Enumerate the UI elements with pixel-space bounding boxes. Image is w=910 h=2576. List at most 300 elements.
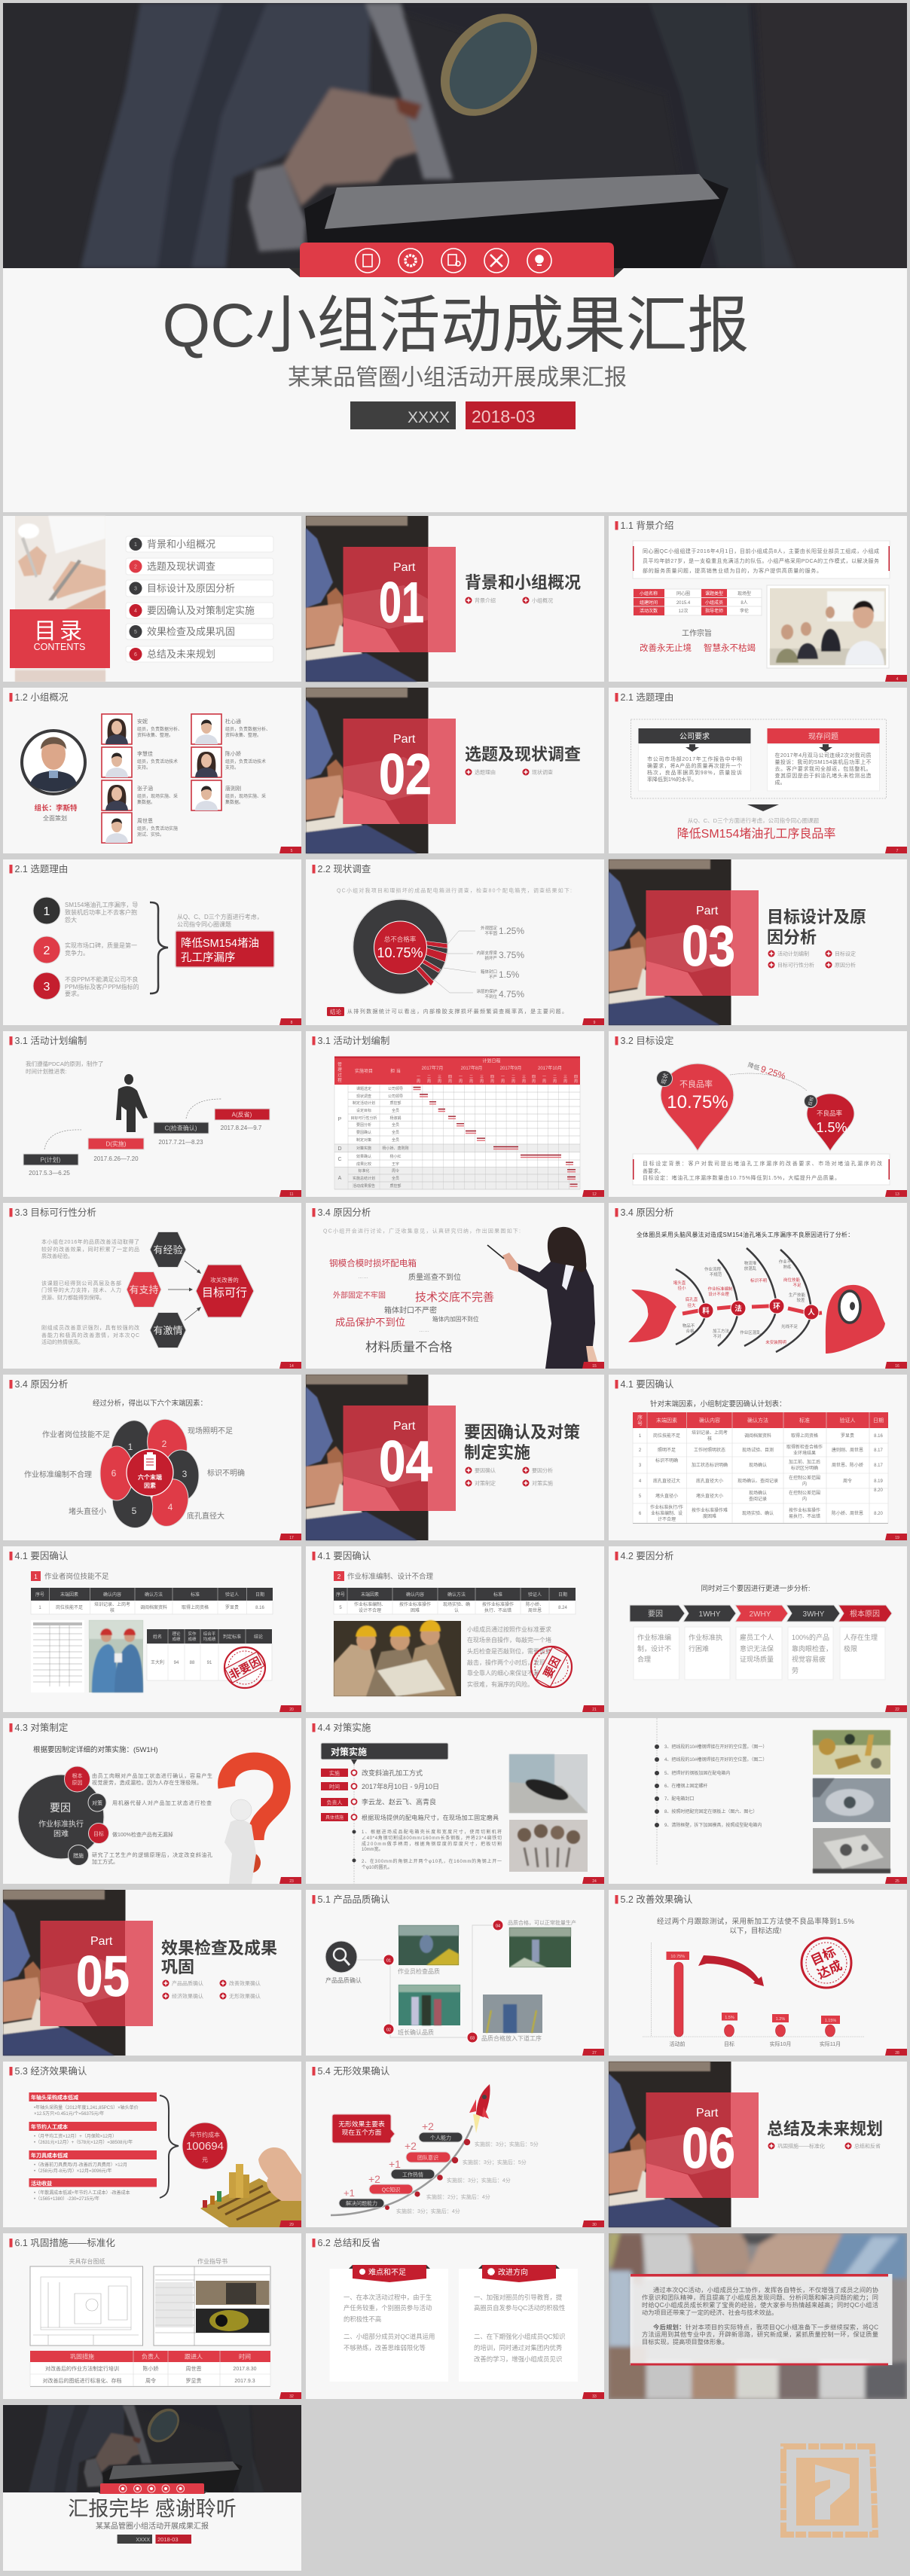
current value drop xyxy=(657,1064,734,1151)
company requirement card xyxy=(639,728,750,791)
illustration: rocket xyxy=(469,2084,490,2133)
standardization table: 巩固措施 xyxy=(70,2353,94,2361)
date tag: 2018-03 xyxy=(472,407,535,426)
target description box: 目标设定：堵油孔工序漏序数量由10.75%降低到1.5%，大幅提升产品质量。 xyxy=(643,1174,840,1181)
decision note: 从Q、C、D三个方面进行考虑， xyxy=(177,913,263,920)
gantt table: 质控部 xyxy=(389,1100,402,1106)
step C: C(检查确认) xyxy=(164,1124,197,1131)
card 1 xyxy=(634,1627,679,1680)
contents item 1 xyxy=(126,536,273,552)
page number: 25 xyxy=(895,1879,899,1884)
page number: 23 xyxy=(289,1879,294,1884)
page number xyxy=(279,2392,301,2399)
motto: 智慧永不枯竭 xyxy=(704,642,756,653)
translucent text panel: 今后规划：针对本项目的实际特点，我项目QC小组准备下一步继续探索，将QC xyxy=(653,2323,878,2330)
speech bubble: 无形效果主要表 xyxy=(338,2120,385,2128)
page number xyxy=(885,1705,907,1712)
petal diagram: 因素 xyxy=(144,1482,156,1489)
card 2: 行困难 xyxy=(689,1644,709,1653)
measure texts: 由员工肉眼对产品加工状态进行确认，容易产生 xyxy=(92,1772,212,1779)
gantt table: 设定目标 xyxy=(356,1108,371,1113)
chevron: 2WHY: 2WHY xyxy=(750,1610,771,1619)
photo: team meeting xyxy=(767,585,889,668)
confirmation table: 确认方法 xyxy=(145,1592,163,1598)
section topics xyxy=(163,1979,261,1999)
panel: section 05 xyxy=(3,1890,301,2056)
company requirement card: 档次，良品率据高到98%，质量投诉 xyxy=(647,769,742,776)
experience text: 本小组在2016年的品质改善活动取得了 xyxy=(41,1238,139,1245)
panel: 3.3 target feasibility xyxy=(3,1203,301,1369)
current problem card: 去。客户要求我司全部返，包括整机。 xyxy=(774,765,871,772)
page number xyxy=(885,1362,907,1369)
bone labels: 放混乱 xyxy=(744,1265,757,1271)
red part block: 04 xyxy=(379,1430,432,1494)
heading: 3.4 原因分析 xyxy=(318,1207,371,1218)
step list xyxy=(655,1744,767,1828)
cause words: 成品保护不到位 xyxy=(335,1317,405,1328)
plan table: 易执行、不出错 xyxy=(789,1513,820,1519)
heading: 3.4 原因分析 xyxy=(15,1379,68,1390)
annual saving badge: 100694 xyxy=(186,2140,224,2153)
bone labels: 熟练 xyxy=(783,1264,792,1270)
step D: D(实施) xyxy=(105,1140,127,1148)
description text: 靠全靠人的细心来保证不漏敲 xyxy=(467,1669,545,1677)
bar: November: 1.15% xyxy=(825,2019,836,2023)
page number: 5 xyxy=(291,849,293,853)
hexagon: experience xyxy=(150,1232,186,1267)
annual saving badge: 元 xyxy=(202,2156,208,2163)
red part block: 01 xyxy=(379,571,424,635)
photo: machined aluminum xyxy=(813,1778,890,1822)
page number xyxy=(279,1018,301,1025)
step C: 2017.7.21—8.23 xyxy=(158,1139,203,1146)
standardization table: 时间 xyxy=(239,2353,251,2361)
current problem card: 在2017年4月双马公司连续2次对我司质 xyxy=(774,752,871,758)
gantt table: C xyxy=(337,1157,342,1162)
icon: magnifying report xyxy=(441,249,466,273)
growth curve xyxy=(331,2126,472,2215)
panel: 6.1 standardization xyxy=(3,2233,301,2399)
curve nodes xyxy=(385,2139,470,2210)
pill: work passion: 工作热情 xyxy=(402,2171,423,2178)
card 4: 靠肉眼检查， xyxy=(792,1644,832,1653)
motto xyxy=(640,628,756,653)
confirmation table: 末端因素 xyxy=(60,1592,78,1598)
panel: 3.2 target setting xyxy=(609,1031,907,1197)
plan table: 堵头直径小 xyxy=(655,1493,678,1499)
gantt table: 王宇 xyxy=(392,1161,399,1167)
page number: 12 xyxy=(592,1192,597,1197)
heading: 5.2 改善效果确认 xyxy=(621,1894,693,1905)
label 3: 1.5% xyxy=(499,969,520,980)
member 4: 组员，负责活动技术 xyxy=(225,758,266,765)
plan table: 标准 xyxy=(799,1417,810,1424)
step A xyxy=(215,1109,270,1131)
exam score table xyxy=(147,1629,272,1680)
panel: section 02 xyxy=(306,688,604,853)
plan table: 核 xyxy=(707,1436,712,1442)
support text: 该课题已经得到公司高层及各部 xyxy=(41,1280,121,1286)
heading: 5.3 经济效果确认 xyxy=(15,2065,87,2077)
bone labels: 岗位技能 xyxy=(783,1277,800,1283)
chevron: key cause xyxy=(630,1605,685,1622)
target value drop: 目标 xyxy=(807,1096,815,1106)
description text: 小组成员通过按照作业标准要求 xyxy=(467,1625,551,1633)
bone labels: 光线不足 xyxy=(781,1323,798,1329)
confirmation table: 按作业标准操作 xyxy=(482,1601,514,1607)
translucent text panel: 通过本次QC活动，小组成员分工协作，发挥各自特长，不仅增强了成员之间的协 xyxy=(653,2286,878,2294)
step C xyxy=(154,1122,209,1146)
confirmation table: 周世恩 xyxy=(528,1607,542,1613)
section heading: 目标设计及原 xyxy=(767,908,866,926)
heading: 4.4 对策实施 xyxy=(318,1722,371,1733)
heading: 5.1 产品品质确认 xyxy=(318,1894,390,1905)
pill: team spirit: 团队意识 xyxy=(417,2154,438,2161)
row: owner xyxy=(321,1797,436,1806)
node: target xyxy=(89,1823,108,1844)
section topics: 经济效果确认 xyxy=(172,1993,203,1999)
info table: 同心圈 xyxy=(676,591,690,597)
highlighted statement xyxy=(176,931,274,967)
plan table: 查阅记录 xyxy=(749,1496,767,1502)
row: implement: 改变斜油孔加工方式 xyxy=(362,1769,423,1777)
section topics: 要因确认 xyxy=(475,1467,496,1473)
node: action: 措施 xyxy=(73,1852,84,1859)
plan table: 4 xyxy=(639,1479,642,1484)
pill: QC knowledge xyxy=(368,2173,413,2194)
confirmation table: 罗显贵 xyxy=(225,1604,239,1610)
member 3: 李慧佳 xyxy=(137,750,153,757)
steps text: 成200mm做手柄用，根据角钢厚度的厚度尺寸，把板切割 xyxy=(362,1841,502,1847)
section heading: 效果检查及成果 xyxy=(161,1939,277,1958)
plan table: 现场确认、查阅记录 xyxy=(737,1478,778,1484)
card 3: 雇员工个人 xyxy=(740,1633,774,1641)
photo: workers in blue xyxy=(89,1620,143,1692)
reason 2 xyxy=(33,936,137,963)
panel: 4.1 non-key cause xyxy=(3,1546,301,1712)
gantt table xyxy=(334,1056,580,1189)
plan table: 8.17 xyxy=(874,1448,883,1453)
member 5: 组员，现场实施、采 xyxy=(137,793,178,799)
before and after scores: 实施前：3分；实施后：4分 xyxy=(447,2177,511,2184)
steps text xyxy=(353,1829,502,1870)
member 2 xyxy=(191,714,270,744)
panel: 4.2 cause analysis whys xyxy=(609,1546,907,1712)
cost item 4: 活动收益 xyxy=(31,2180,52,2187)
stamp: not key cause xyxy=(224,1647,265,1688)
cause words: 技术交底不完善 xyxy=(415,1290,494,1304)
gantt table: 管 xyxy=(337,1061,342,1067)
confirmation table: 设计不合理 xyxy=(359,1607,381,1613)
card 1: 合理 xyxy=(637,1655,651,1663)
measure texts: 研究了工艺生产的逻辑原理后，决定改变斜油孔 xyxy=(92,1851,212,1858)
hexagon: feasible goal: 攻关改善的 xyxy=(210,1276,239,1283)
stamp: target reached xyxy=(802,1938,851,1988)
cost item 4: •（年散漏成本低减+年节约人工成本）-改善成本 xyxy=(34,2190,130,2196)
red part block xyxy=(344,547,456,652)
panel: contents slide xyxy=(3,516,301,682)
red contents block: 目录 xyxy=(34,619,85,644)
gantt table: 杨淑娟 xyxy=(389,1116,402,1121)
step 03: 品质合格放入下道工序 xyxy=(481,2034,542,2042)
header block xyxy=(321,1743,448,1765)
panel: 2.1 topic reasons conclusion xyxy=(3,859,301,1025)
section topics xyxy=(466,597,553,604)
bone labels: 底孔直 xyxy=(686,1296,698,1302)
red part block: 03 xyxy=(682,914,735,978)
panel: 5.2 improvement effect xyxy=(609,1890,907,2056)
panel: 5.4 intangible effect xyxy=(306,2062,604,2227)
cost item 2 xyxy=(29,2122,157,2145)
measure texts: 视觉疲劳，造成漏检。因为人存在生理极限。 xyxy=(92,1779,202,1786)
contents item 6: 6 xyxy=(134,652,137,658)
hexagon: feasible goal: 目标可行 xyxy=(202,1286,247,1299)
red part block xyxy=(344,1406,456,1511)
card: improvements: 的培训，同时通过对集团内优秀 xyxy=(474,2344,563,2352)
illustration: coins and abacus with hand xyxy=(200,2147,301,2227)
chevron: 3WHY: 3WHY xyxy=(803,1610,825,1619)
intro: 以下，目标达成! xyxy=(729,1927,782,1936)
panel: closing thanks slide xyxy=(3,2402,301,2571)
page number: 20 xyxy=(289,1708,294,1712)
gantt table: 周令 xyxy=(392,1168,399,1174)
passion text: 善能力和极高的改善激情，对本次QC xyxy=(41,1332,139,1338)
gantt table: 标准化 xyxy=(358,1168,370,1174)
plan table: 取得新检查合格作 xyxy=(786,1444,823,1450)
current value drop: 10.75% xyxy=(667,1092,728,1113)
page number xyxy=(582,2220,604,2227)
section topics: 要因分析 xyxy=(532,1467,553,1473)
card: improvements: 二、在下期强化小组成员QC知识 xyxy=(474,2333,565,2340)
confirmation table: 陈小娇、 xyxy=(526,1601,544,1607)
section heading: 总结及未来规划 xyxy=(767,2120,883,2138)
work instruction document xyxy=(154,2266,270,2346)
factor labels: 标识不明确 xyxy=(207,1468,245,1478)
stamp: not key cause: 非要因 xyxy=(228,1655,264,1682)
bone labels: 作业流程 xyxy=(704,1266,721,1272)
gantt table: 实施总结计划 xyxy=(353,1176,375,1181)
cause words: 质量巡查不到位 xyxy=(408,1272,461,1282)
confirmation table: 困难 xyxy=(411,1607,420,1613)
spine xyxy=(682,1306,822,1314)
down arrow xyxy=(698,1955,764,1986)
row: measure xyxy=(321,1813,499,1821)
plan table: 内 xyxy=(802,1481,807,1487)
factor labels: 堵头直径小 xyxy=(69,1506,106,1516)
team leader name: 组长：李斯特 xyxy=(34,804,78,813)
exam record document xyxy=(31,1620,84,1692)
magnifier icon xyxy=(325,1941,357,1973)
panel: 4.4 implementation steps xyxy=(609,1718,907,1884)
translucent text panel: 目标实现，提高项目整体形象。 xyxy=(642,2338,728,2346)
label 2: 损坏严 xyxy=(484,955,497,961)
section topics: 对策实施 xyxy=(532,1479,553,1487)
pill: QC knowledge: QC知识 xyxy=(382,2186,400,2193)
page number xyxy=(885,675,907,682)
before and after scores: 实施前：3分；实施后：4分 xyxy=(396,2208,460,2214)
member 2: 资料收集、整理。 xyxy=(225,732,261,738)
cost item 4 xyxy=(29,2178,157,2202)
bone labels: 较差 xyxy=(796,1297,805,1303)
gantt table: 程 xyxy=(337,1077,342,1083)
step D: 2017.6.26—7.20 xyxy=(93,1155,139,1162)
gantt table: 杨小娇、唐则刚 xyxy=(382,1146,409,1151)
cause words: …… xyxy=(358,1274,368,1280)
bone labels: 径小 xyxy=(677,1285,686,1291)
passion text xyxy=(41,1324,139,1345)
member 1: 资料收集、整理。 xyxy=(137,732,173,738)
before and after scores: 实施前：3分；实施后：5分 xyxy=(463,2159,527,2165)
description text: 头后检查是否敲到位，需要重复 xyxy=(467,1647,551,1655)
conclusion: 从排列数据统计可以看出，内部橡胶支撑损坏最频繁调查概率高，是主要问题。 xyxy=(347,1008,567,1015)
plan table: 8.20 xyxy=(874,1512,883,1516)
pill: problem solving xyxy=(339,2187,384,2208)
cost item 2: •（月平均工资×12月）+（月保险×12月） xyxy=(34,2133,117,2139)
pill: problem solving: 解决问题能力 xyxy=(346,2199,377,2207)
photo: brass fittings xyxy=(813,1730,890,1775)
current problem card: 成。 xyxy=(774,779,785,786)
plan table: 底孔直径过大 xyxy=(653,1478,680,1484)
cost item 3: 年刀具成本低减 xyxy=(31,2152,68,2159)
date tag: 2018-03 xyxy=(157,2536,179,2543)
heading: 4.1 要因确认 xyxy=(15,1551,69,1561)
annual saving badge: 年节约成本 xyxy=(190,2131,220,2138)
gantt table: P xyxy=(338,1117,342,1122)
label 1: 1.25% xyxy=(499,926,524,936)
section topics: 无形效果确认 xyxy=(229,1993,261,1999)
plan table: 培训记录、上岗考 xyxy=(692,1430,728,1436)
reason 3 xyxy=(33,972,139,1000)
heading: 1.1 背景介绍 xyxy=(621,520,673,531)
gantt table: 2017年8月 xyxy=(461,1065,482,1071)
plan table: 取得上岗资格 xyxy=(791,1433,818,1439)
intro: 同时对三个要因进行更进一步分析: xyxy=(701,1584,811,1593)
page number: 21 xyxy=(592,1708,597,1712)
page number: 14 xyxy=(289,1364,294,1369)
pill: work passion: +1 xyxy=(389,2158,401,2170)
confirmation table: 确认内容 xyxy=(406,1592,424,1598)
exam score table: 均成绩 xyxy=(203,1636,216,1642)
step 02: 02 xyxy=(386,2028,391,2032)
main title: QC小组活动成果汇报 xyxy=(162,291,750,360)
bar: October: 1.2% xyxy=(776,2017,785,2022)
description text: 在现场亲自操作，每敲完一个堵 xyxy=(467,1636,551,1644)
bar: November: 实际11月 xyxy=(820,2040,841,2047)
page number xyxy=(279,1534,301,1540)
plan table: 验证人 xyxy=(839,1417,856,1424)
heading: 3.1 活动计划编制 xyxy=(318,1035,389,1046)
heading: 2.2 现状调查 xyxy=(318,864,371,874)
heading: 4.1 要因确认 xyxy=(621,1379,674,1390)
plan table: 2 xyxy=(639,1448,642,1453)
page number xyxy=(582,1705,604,1712)
bone labels: 作业区混乱 xyxy=(740,1329,761,1335)
node: person xyxy=(804,1305,819,1320)
subtitle: 某某品管圈小组活动开展成果汇报 xyxy=(288,365,627,390)
reason 2: 竞争力。 xyxy=(65,949,89,957)
section topics: 背景介绍 xyxy=(475,597,496,604)
heading: 4.1 要因确认 xyxy=(318,1551,371,1561)
exam score table: 王大利 xyxy=(151,1659,164,1665)
exam score table: 实作 xyxy=(188,1631,197,1637)
plan table: 按作业标准操作 xyxy=(789,1507,820,1513)
gantt table: 现状调查 xyxy=(356,1094,371,1099)
description text: 敲击，操作两个小时后，发现 xyxy=(467,1659,545,1666)
bone labels: 堵头直 xyxy=(673,1280,686,1286)
member 3: 支持。 xyxy=(137,765,151,771)
step list: 4、把线段的10#槽钢焊接在开好的空位置。（图二） xyxy=(664,1757,767,1763)
translucent text panel xyxy=(630,2274,892,2365)
bone labels: 不对 xyxy=(713,1333,722,1339)
step list: 7、配电箱封口 xyxy=(664,1796,694,1802)
experience text: 较好的改善效果，同时积累了一定的品 xyxy=(41,1246,139,1253)
start label: 产品品质确认 xyxy=(325,1976,362,1984)
bar: target xyxy=(722,2013,737,2047)
page number xyxy=(279,1190,301,1197)
plan table: 周令 xyxy=(843,1478,852,1484)
bone labels: 不规范 xyxy=(710,1271,722,1277)
bone labels: 未安装照明 xyxy=(765,1339,786,1345)
confirmation table: 确认内容 xyxy=(103,1592,121,1598)
page number xyxy=(279,1705,301,1712)
plan table: 岗位技能不足 xyxy=(653,1433,680,1439)
axes xyxy=(643,1943,865,2037)
icon: climbing person xyxy=(116,1074,148,1132)
plan table: 按作业标准操作难 xyxy=(692,1507,728,1513)
doc label: 作业指导书 xyxy=(197,2257,228,2265)
gantt table: 制定活动计划 xyxy=(353,1100,375,1106)
bar: target: 目标 xyxy=(724,2040,734,2047)
card: difficulties: 二、小组部分成员对QC道具运用 xyxy=(344,2333,435,2340)
card: improvements: 一、加强对圈员的引导教育，提 xyxy=(474,2294,563,2301)
petal diagram xyxy=(100,1415,199,1533)
cover photo: businessman with magnifier and book xyxy=(3,0,907,268)
exam score table: 成绩 xyxy=(188,1636,197,1642)
bar: October xyxy=(770,2014,791,2047)
info table: 组建时间 xyxy=(640,600,658,606)
section heading: 选题及现状调查 xyxy=(465,745,581,764)
label 1 xyxy=(481,925,524,936)
section heading xyxy=(767,908,866,947)
company requirement card: 率降低到1%的水平。 xyxy=(647,776,697,783)
gantt table: 杨小红 xyxy=(389,1154,402,1159)
intro xyxy=(657,1917,855,1936)
contents item 2: 选题及现状调查 xyxy=(147,560,215,572)
member 6 xyxy=(191,780,266,810)
section topics xyxy=(466,768,553,776)
confirmation table: 按作业标准操作 xyxy=(399,1601,431,1607)
step 01: 01 xyxy=(386,1958,391,1963)
section topics: 总结和反省 xyxy=(854,2142,881,2150)
heading: 3.1 活动计划编制 xyxy=(15,1035,87,1046)
red contents block xyxy=(10,609,110,668)
cost item 4: •（1565+1380）-230=2715元/年 xyxy=(34,2196,99,2202)
intro text box: 部的服务质量问题，提高销售业绩为目的，为客户提供高质量的服务。 xyxy=(643,567,822,574)
factor labels xyxy=(24,1426,245,1521)
label 4: 涂层的保护 xyxy=(476,988,497,994)
panel: section 03 xyxy=(609,859,907,1025)
confirmation table xyxy=(334,1588,576,1614)
stamp: target reached: 目标 xyxy=(809,1945,838,1968)
heading: 3.3 目标可行性分析 xyxy=(15,1207,96,1218)
panel: section 04 xyxy=(306,1375,604,1540)
step P: P(计划) xyxy=(41,1155,61,1163)
section heading xyxy=(161,1939,277,1976)
contents item 6: 总结及未来规划 xyxy=(147,649,215,660)
stamp: target reached: 达成 xyxy=(815,1958,844,1982)
node: root cause: 原因 xyxy=(72,1780,83,1786)
current value drop: 现状 xyxy=(659,1072,670,1085)
